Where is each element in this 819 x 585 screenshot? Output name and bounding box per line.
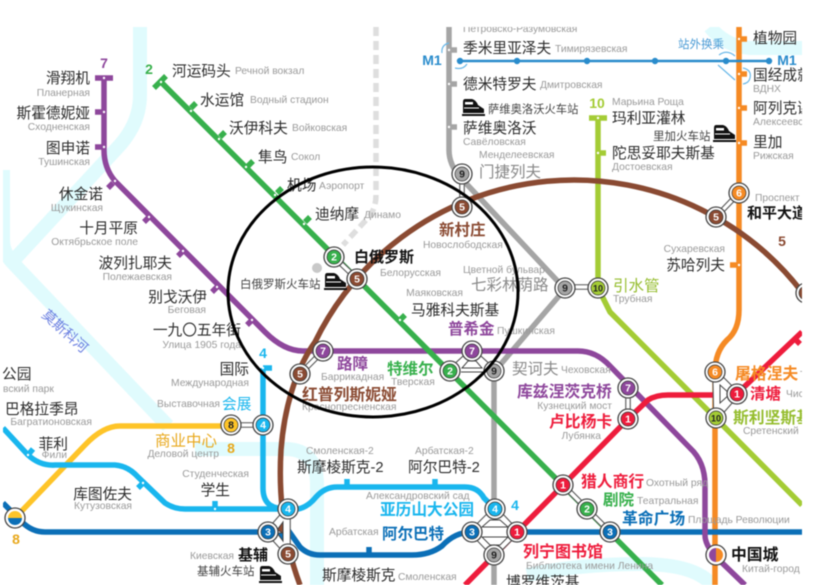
label 十月平原 bbox=[51, 220, 138, 248]
number 5: 5 bbox=[778, 233, 786, 249]
station: Kitay-Gorod split bbox=[706, 545, 726, 565]
station: Prospekt Mira 5: 5 bbox=[713, 212, 719, 224]
train icons bbox=[259, 99, 736, 583]
label 会展: Выставочная bbox=[157, 399, 220, 410]
label 里加火车站: 里加火车站 bbox=[653, 129, 711, 143]
label 红普列斯妮娅: 红普列斯妮娅 bbox=[302, 385, 397, 404]
label 巴格拉季昂: 巴格拉季昂 bbox=[5, 401, 78, 418]
label 里加: 里加 bbox=[753, 134, 782, 151]
station: Vystavochnaya 4: 4 bbox=[260, 420, 266, 432]
label 波列扎耶夫 bbox=[99, 255, 172, 283]
label 门捷列夫: Менделеевская bbox=[479, 150, 554, 161]
station: Novoslobodskaya 5: 5 bbox=[459, 202, 465, 214]
station: Belorusskaya 2: 2 bbox=[331, 252, 337, 264]
station: Sretensky Bulvar 10 bbox=[706, 408, 726, 428]
label 沃伊科夫: 沃伊科夫 bbox=[229, 120, 288, 137]
label 和平大道: Проспект bbox=[755, 193, 800, 204]
callout: black highlight ellipse bbox=[228, 167, 518, 417]
label 萨维奥洛沃火车站: 萨维奥洛沃火车站 bbox=[488, 102, 578, 116]
label 机场 bbox=[287, 177, 365, 194]
label 苏哈列夫 bbox=[664, 244, 725, 274]
label 特维尔 bbox=[387, 359, 435, 388]
label 国经成就 bbox=[753, 67, 812, 95]
label 国经成就: ВДНХ bbox=[753, 84, 781, 95]
station: Tsvetnoy Bulvar 9: 9 bbox=[562, 283, 568, 295]
label 公园 bbox=[2, 366, 54, 395]
station: Komsomolskaya edge 5 bbox=[794, 282, 803, 304]
label 新村庄: 新村庄 bbox=[439, 220, 486, 239]
label 会展 bbox=[157, 396, 252, 413]
label 列宁图书馆: 列宁图书馆 bbox=[523, 542, 603, 561]
label 列宁图书馆 bbox=[523, 542, 653, 572]
label 斯霍德妮娅: Сходненская bbox=[28, 122, 90, 133]
label 卢比杨卡 bbox=[549, 413, 612, 442]
label 阿列克谢: Алексеевская bbox=[753, 117, 819, 128]
station: Kievskaya 3: 3 bbox=[265, 527, 271, 539]
label 契诃夫: Чеховская bbox=[561, 365, 611, 376]
station: Belorusskaya 5: 5 bbox=[354, 274, 360, 286]
label 滑翔机: Планерная bbox=[37, 88, 90, 99]
label 德米特罗夫 bbox=[463, 75, 603, 93]
station: Kuznetsky Most 7 bbox=[618, 378, 638, 398]
label 斯利坚斯: Сретенский bbox=[743, 426, 799, 437]
label 玛利亚灌林: Марьина Роща bbox=[612, 97, 684, 108]
label 新村庄: Новослободская bbox=[423, 239, 503, 251]
label 迪纳摩: 迪纳摩 bbox=[315, 205, 359, 223]
label 阿列克谢: 阿列克谢 bbox=[753, 100, 812, 117]
station: Tsvetnoy Bulvar 9 bbox=[555, 278, 575, 298]
label 库图佐夫: Кутузовская bbox=[74, 501, 132, 512]
station: Lubyanka 1 bbox=[618, 409, 638, 429]
icon: train Savyolovsky bbox=[462, 99, 485, 116]
label 斯霍德妮娅: 斯霍德妮娅 bbox=[17, 104, 90, 122]
station: Belorusskaya 2 bbox=[324, 247, 344, 267]
label 阿尔巴特 bbox=[329, 524, 444, 543]
station: Ploshchad Revolyutsii 3 bbox=[600, 522, 620, 542]
label 和平大道: 和平大道 bbox=[747, 204, 807, 222]
label 季米里亚泽夫 bbox=[463, 40, 627, 57]
label river 莫斯科河: 莫斯科河 bbox=[39, 306, 91, 356]
label 国际: 国际 bbox=[220, 361, 249, 378]
label 国际: Международная bbox=[171, 378, 249, 389]
label 巴格拉季昂: Багратионовская bbox=[10, 417, 92, 428]
label 菲利: 菲利 bbox=[39, 436, 68, 453]
label 机场: 机场 bbox=[287, 177, 316, 194]
station: Mezhdunarodnaya split 3/8 bbox=[5, 508, 25, 528]
label 库兹涅茨克桥: 库兹涅茨克桥 bbox=[517, 382, 612, 401]
station: Trubnaya 10 bbox=[588, 278, 608, 298]
station: Sretensky Bulvar 10: 10 bbox=[711, 413, 721, 423]
label 屠格涅夫: Т bbox=[800, 370, 807, 381]
label 列宁图书馆: Библиотека имени Ленина bbox=[526, 560, 653, 572]
label 猎人商行: 猎人商行 bbox=[581, 473, 644, 491]
stations bbox=[5, 164, 816, 565]
label 门捷列夫: 门捷列夫 bbox=[479, 163, 541, 181]
label 阿尔巴特: 阿尔巴特 bbox=[382, 524, 444, 543]
label 路障 bbox=[321, 354, 384, 383]
label 波列扎耶夫: Полежаевская bbox=[103, 272, 172, 283]
label 基辅 bbox=[190, 546, 268, 564]
label 卢比杨卡: Лубянка bbox=[561, 430, 601, 442]
icon: train Kievsky bbox=[259, 566, 282, 583]
label 图申诺: Тушинская bbox=[38, 157, 90, 168]
station: Trubnaya 10: 10 bbox=[593, 283, 603, 293]
station: Kievskaya 4: 4 bbox=[285, 504, 291, 516]
station: Krasnopresnenskaya 5: 5 bbox=[297, 369, 303, 381]
label 河运码头 bbox=[172, 63, 304, 80]
station: Pushkinskaya 7 bbox=[462, 341, 482, 361]
station: Borovitskaya 9 bbox=[484, 545, 504, 565]
label 中国城 bbox=[731, 545, 800, 575]
label 河运码头: 河运码头 bbox=[172, 63, 231, 80]
M1 right: M1 bbox=[777, 52, 797, 68]
label 迪纳摩 bbox=[315, 205, 401, 223]
label 路障: 路障 bbox=[337, 354, 368, 373]
label 苏哈列夫: 苏哈列夫 bbox=[666, 257, 725, 274]
line 5 brown bbox=[280, 180, 805, 585]
label 普希金: Пушкинская bbox=[497, 326, 555, 337]
label 玛利亚灌林 bbox=[612, 97, 686, 127]
label 白俄罗斯: 白俄罗斯 bbox=[354, 248, 414, 266]
label 引水管 bbox=[613, 277, 660, 305]
label 契诃夫: 契诃夫 bbox=[512, 360, 559, 378]
label 十月平原: 十月平原 bbox=[79, 220, 138, 237]
station: Vystavochnaya 8: 8 bbox=[228, 420, 234, 432]
label 水运馆: Водный стадион bbox=[250, 95, 329, 106]
label 苏哈列夫: Сухаревская bbox=[664, 244, 725, 255]
label 一九〇五年街 bbox=[153, 322, 241, 351]
label 休金诺: 休金诺 bbox=[59, 186, 103, 203]
label 河运码头: Речной вокзал bbox=[235, 66, 304, 77]
label 清塘 bbox=[750, 384, 819, 403]
label 学生: 学生 bbox=[201, 482, 230, 499]
label 季米里亚泽夫: 季米里亚泽夫 bbox=[463, 40, 551, 57]
label 商业中心: Деловой центр bbox=[147, 449, 219, 460]
label 阿尔巴特-2 bbox=[408, 445, 480, 476]
label 菲利 bbox=[39, 436, 68, 461]
station: Kievskaya 3 bbox=[258, 522, 278, 542]
station: Kuznetsky Most 7: 7 bbox=[625, 383, 631, 395]
station: Chekhovskaya 9: 9 bbox=[491, 366, 497, 378]
label 国经成就: 国经成就 bbox=[753, 67, 812, 84]
station: Belorusskaya 5 bbox=[347, 269, 367, 289]
line 10 light green bbox=[598, 118, 802, 505]
label 红普列斯妮娅 bbox=[302, 385, 397, 413]
station: Tverskaya 2: 2 bbox=[447, 366, 453, 378]
station: Kievskaya 5 bbox=[278, 544, 298, 564]
label 七彩林荫路: 七彩林荫路 bbox=[471, 276, 549, 294]
station: Aleksandrovsky Sad 4: 4 bbox=[492, 504, 498, 516]
station: Chistye Prudy 1 bbox=[727, 384, 747, 404]
station: Vystavochnaya 8 bbox=[221, 415, 241, 435]
station: Arbatskaya 3: 3 bbox=[469, 527, 475, 539]
label 隼鸟: 隼鸟 bbox=[258, 149, 287, 166]
label 猎人商行 bbox=[581, 473, 708, 491]
station: Okhotny Ryad 1 bbox=[553, 475, 573, 495]
label 基辅: Киевская bbox=[190, 551, 234, 562]
station: Aleksandrovsky Sad 4 bbox=[485, 499, 505, 519]
label 菲利: Фили bbox=[42, 450, 67, 461]
label 剧院 bbox=[603, 490, 698, 509]
label 陀思妥耶夫斯基: 陀思妥耶夫斯基 bbox=[612, 145, 715, 162]
label 沃伊科夫 bbox=[229, 120, 347, 137]
station: Arbatskaya 3 bbox=[462, 522, 482, 542]
line 3 dark blue bbox=[3, 503, 802, 555]
label 库图佐夫 bbox=[73, 486, 132, 512]
label 革命广场: 革命广场 bbox=[622, 509, 685, 528]
label 亚历山大公园: Александровский сад bbox=[366, 491, 470, 502]
label 斯霍德妮娅 bbox=[17, 104, 90, 133]
label 红普列斯妮娅: Краснопресненская bbox=[302, 402, 396, 413]
label 库兹涅茨克桥: Кузнецкий мост bbox=[537, 401, 612, 412]
label 公园: вский парк bbox=[3, 384, 54, 395]
label 里加 bbox=[753, 134, 794, 162]
label 门捷列夫 bbox=[479, 150, 554, 181]
label 斯摩棱斯克: Смоленская bbox=[398, 572, 457, 583]
label 亚历山大公园 bbox=[366, 491, 474, 519]
label 阿尔巴特-2: Арбатская-2 bbox=[415, 445, 474, 457]
label 里加: Рижская bbox=[753, 151, 794, 162]
station: Borovitskaya 9: 9 bbox=[491, 550, 497, 562]
number 4 left: 4 bbox=[259, 345, 267, 361]
label Петровско-Разумовская: Петровско-Разумовская bbox=[463, 24, 577, 35]
station: Tverskaya 2 bbox=[440, 361, 460, 381]
line 8 yellow bbox=[15, 426, 231, 518]
label 猎人商行: Охотный ряд bbox=[646, 478, 708, 489]
label 卢比杨卡: 卢比杨卡 bbox=[549, 413, 612, 431]
station: Barrikadnaya 7: 7 bbox=[320, 346, 326, 358]
transfer stair markers bbox=[277, 361, 730, 545]
label 白俄罗斯 bbox=[354, 248, 441, 279]
label 一九〇五年街: 一九〇五年街 bbox=[153, 322, 241, 339]
label 休金诺: Щукинская bbox=[51, 203, 103, 214]
line M1 monorail bbox=[442, 43, 772, 84]
label 中国城: 中国城 bbox=[731, 545, 779, 564]
label 阿尔巴特: Арбатская bbox=[329, 526, 379, 538]
station: Vystavochnaya 4 bbox=[253, 415, 273, 435]
label 革命广场: Площадь Революции bbox=[688, 515, 790, 526]
label 迪纳摩: Динамо bbox=[364, 210, 401, 221]
line 9 grey bbox=[449, 27, 565, 585]
label 隼鸟 bbox=[258, 149, 320, 166]
label 萨维奥洛沃: Савёловская bbox=[463, 137, 526, 148]
station: Prospekt Mira 6: 6 bbox=[736, 188, 742, 200]
label 一九〇五年街: Улица 1905 года bbox=[162, 340, 241, 351]
label 斯摩棱斯克 bbox=[322, 566, 457, 584]
station: Ploshchad Revolyutsii 3: 3 bbox=[607, 527, 613, 539]
station: Kievskaya 4 bbox=[278, 499, 298, 519]
label 波列扎耶夫: 波列扎耶夫 bbox=[99, 255, 172, 272]
label 别戈沃伊: 别戈沃伊 bbox=[148, 289, 207, 306]
label 新村庄 bbox=[423, 220, 503, 251]
label 马雅科夫斯基: Маяковская bbox=[406, 288, 463, 299]
line 6 orange bbox=[715, 27, 739, 585]
label 白俄罗斯火车站: 白俄罗斯火车站 bbox=[240, 277, 321, 291]
label 陀思妥耶夫斯基: Достоевская bbox=[612, 162, 673, 173]
label 国际 bbox=[171, 361, 249, 389]
label 德米特罗夫: 德米特罗夫 bbox=[463, 75, 537, 93]
label 斯摩棱斯克: 斯摩棱斯克 bbox=[322, 566, 396, 584]
label 普希金: 普希金 bbox=[448, 319, 495, 338]
label 植物园: 植物园 bbox=[753, 30, 797, 47]
station: Biblioteka Lenina 1 bbox=[507, 522, 527, 542]
M1 left: M1 bbox=[422, 52, 442, 68]
label 玛利亚灌林: 玛利亚灌林 bbox=[612, 110, 686, 127]
station: Novoslobodskaya 5 bbox=[452, 197, 472, 217]
station: Turgenevskaya 6: 6 bbox=[712, 367, 718, 379]
label 斯摩棱斯克-2: 斯摩棱斯克-2 bbox=[297, 458, 384, 476]
label 斯利坚斯: 斯利坚斯基 bbox=[733, 408, 812, 427]
label 萨维奥洛沃 bbox=[463, 120, 537, 148]
label 屠格涅夫: 屠格涅夫 bbox=[735, 364, 798, 383]
station: Biblioteka Lenina 1: 1 bbox=[514, 527, 520, 539]
label 契诃夫 bbox=[512, 360, 611, 378]
station: Krasnopresnenskaya 5 bbox=[290, 364, 310, 384]
label 斯利坚斯 bbox=[733, 408, 812, 437]
label 引水管: Трубная bbox=[613, 293, 652, 305]
label 滑翔机: 滑翔机 bbox=[46, 70, 90, 87]
station: Prospekt Mira 6 bbox=[729, 183, 749, 203]
number 8: 8 bbox=[227, 440, 235, 456]
label 别戈沃伊: Беговая bbox=[168, 305, 206, 316]
icon: planned station dot bbox=[312, 263, 322, 273]
label 别戈沃伊 bbox=[148, 289, 207, 316]
label 特维尔: Тверская bbox=[391, 377, 435, 388]
label 图申诺 bbox=[38, 140, 90, 168]
label 剧院: 剧院 bbox=[603, 490, 635, 509]
label 斯摩棱斯克-2 bbox=[297, 446, 384, 476]
label 巴格拉季昂 bbox=[5, 401, 92, 428]
label 休金诺 bbox=[51, 186, 103, 214]
label 沃伊科夫: Войковская bbox=[292, 123, 347, 134]
label 阿列克谢 bbox=[753, 100, 819, 128]
label 普希金 bbox=[448, 319, 555, 338]
station: Mendeleevskaya 9 bbox=[452, 164, 472, 184]
label 引水管: 引水管 bbox=[613, 277, 660, 295]
line 2 green bbox=[161, 82, 662, 585]
number 7: 7 bbox=[100, 55, 108, 71]
label 清塘: 清塘 bbox=[750, 384, 781, 403]
label 七彩林荫路: Цветной бульвар bbox=[463, 264, 545, 276]
station: Pushkinskaya 7: 7 bbox=[469, 346, 475, 358]
line 1 red bbox=[465, 332, 802, 585]
label 库图佐夫: 库图佐夫 bbox=[73, 486, 132, 503]
label 马雅科夫斯基 bbox=[406, 288, 499, 319]
label 德米特罗夫: Дмитровская bbox=[540, 80, 603, 91]
label 水运馆 bbox=[200, 92, 329, 109]
label 中国城: Китай-город bbox=[742, 564, 800, 575]
line 7 purple bbox=[104, 78, 745, 585]
label 学生: Студенческая bbox=[182, 469, 249, 480]
number 10: 10 bbox=[589, 95, 605, 111]
station: Teatralnaya 2 bbox=[577, 499, 597, 519]
label 萨维奥洛沃: 萨维奥洛沃 bbox=[463, 120, 537, 137]
label 站外换乘: 站外换乘 bbox=[678, 37, 724, 51]
label 季米里亚泽夫: Тимирязевская bbox=[555, 44, 627, 55]
label 水运馆: 水运馆 bbox=[200, 92, 244, 109]
number 8 left: 8 bbox=[12, 531, 20, 547]
station: Okhotny Ryad 1: 1 bbox=[560, 480, 566, 492]
label 机场: Аэропорт bbox=[319, 181, 365, 192]
station: Mendeleevskaya 9: 9 bbox=[459, 169, 465, 181]
label 基辅火车站: 基辅火车站 bbox=[197, 564, 255, 578]
icon: train Belorussky bbox=[324, 273, 347, 290]
label 阿尔巴特-2: 阿尔巴特-2 bbox=[408, 459, 480, 476]
line 4 cyan bbox=[3, 368, 495, 509]
number 2: 2 bbox=[145, 61, 153, 77]
label 图申诺: 图申诺 bbox=[46, 140, 90, 157]
label 陀思妥耶夫斯基 bbox=[612, 145, 715, 173]
station: Kievskaya 5: 5 bbox=[285, 549, 291, 561]
label 剧院: Театральная bbox=[637, 496, 698, 507]
label 基辅: 基辅 bbox=[238, 546, 268, 564]
label 学生 bbox=[182, 469, 249, 499]
label 和平大道 bbox=[747, 193, 807, 222]
line: dashed planned route bbox=[343, 27, 376, 245]
label 亚历山大公园: 亚历山大公园 bbox=[380, 501, 474, 519]
transfer connectors bbox=[231, 174, 739, 555]
station: Turgenevskaya 6 bbox=[705, 362, 725, 382]
number 4 right: 4 bbox=[511, 497, 519, 513]
label 白俄罗斯: Белорусская bbox=[380, 268, 441, 279]
label 库兹涅茨克桥 bbox=[517, 382, 612, 412]
label 斯摩棱斯克-2: Смоленская-2 bbox=[306, 446, 374, 457]
label 会展: 会展 bbox=[222, 396, 252, 413]
label 七彩林荫路 bbox=[463, 264, 549, 294]
label 马雅科夫斯基: 马雅科夫斯基 bbox=[411, 302, 499, 319]
label 滑翔机 bbox=[37, 70, 90, 99]
station: Teatralnaya 2: 2 bbox=[584, 504, 590, 516]
station: Chistye Prudy 1: 1 bbox=[734, 389, 740, 401]
label 商业中心 bbox=[147, 432, 219, 460]
icon: train Rizhsky bbox=[713, 125, 736, 142]
label 隼鸟: Сокол bbox=[291, 152, 320, 163]
station: Barrikadnaya 7 bbox=[313, 341, 333, 361]
label 革命广场 bbox=[622, 509, 790, 528]
station: Chekhovskaya 9 bbox=[484, 361, 504, 381]
label 商业中心: 商业中心 bbox=[155, 432, 217, 450]
label 十月平原: Октябрьское поле bbox=[51, 236, 138, 248]
label 公园: 公园 bbox=[2, 366, 31, 383]
label 特维尔: 特维尔 bbox=[387, 359, 434, 378]
station: Lubyanka 1: 1 bbox=[625, 414, 631, 426]
station: Prospekt Mira 5 bbox=[706, 207, 726, 227]
label 路障: Баррикадная bbox=[321, 372, 384, 383]
